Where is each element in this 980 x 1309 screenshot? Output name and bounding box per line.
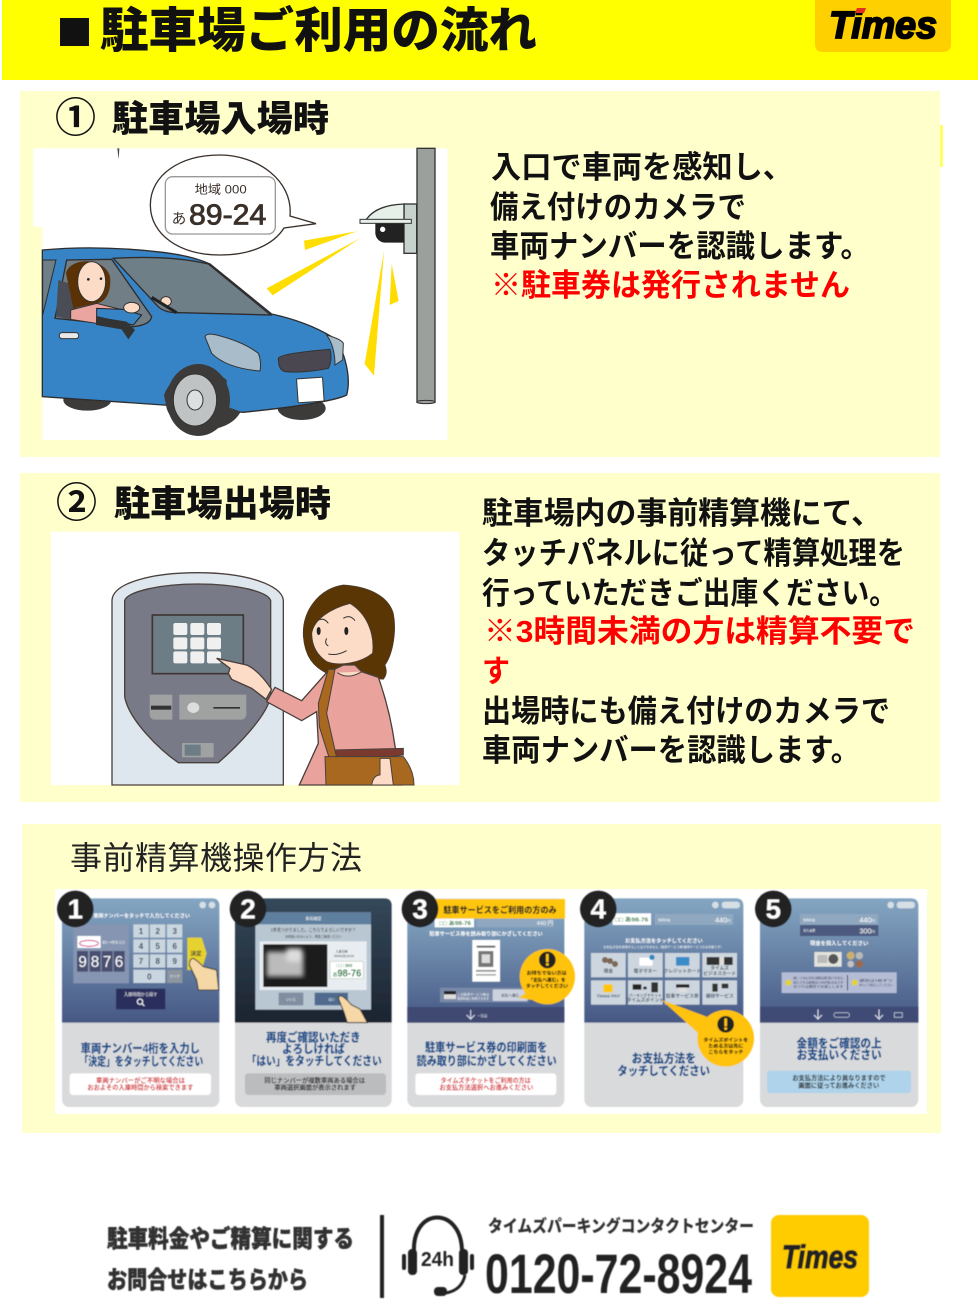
card: step 5: 円 — [871, 919, 875, 923]
card: step 4: タイムズ — [710, 964, 729, 971]
description: exit: 出場時にも備え付けのカメラで — [482, 694, 890, 729]
card: step 4: タッチしてください — [617, 1063, 710, 1078]
step 3 — [402, 891, 575, 1107]
card: step 3: お支払方法選択へお進みください — [439, 1083, 533, 1092]
card: step 5: お支払いください — [797, 1047, 882, 1062]
card: step 1: 6 — [115, 954, 123, 971]
contact center name: タイムズパーキングコンタクトセンター — [488, 1216, 754, 1236]
description: exit: 行っていただきご出庫ください。 — [482, 576, 897, 611]
badge: 5: 5 — [766, 894, 781, 925]
card: step 5: 硬貨は1枚ずつ — [859, 978, 893, 983]
icon: headset: 24h — [421, 1249, 454, 1271]
camera pole — [417, 148, 435, 404]
card: step 4: 現金 — [604, 967, 613, 974]
card: step 2 — [235, 898, 392, 1107]
card: step 1: 4 — [139, 942, 144, 951]
description: entry — [490, 150, 870, 303]
card: step 5 — [760, 898, 918, 1107]
card: step 4: クレジットカード — [664, 967, 701, 974]
card: step 1: 決定 — [190, 950, 202, 958]
card: step 4: □□ あ98-76 — [615, 916, 648, 924]
description: entry: 備え付けのカメラで — [490, 190, 746, 225]
badge: 4: 4 — [591, 894, 607, 925]
card: step 4: お支払方法をタッチしてください — [625, 937, 703, 944]
description: exit: 駐車場内の事前精算機にて、 — [482, 496, 882, 531]
title marker — [60, 18, 89, 46]
card: step 4: お支払方法を — [632, 1051, 696, 1066]
card: step 4: 駐車料金 — [658, 917, 670, 922]
card: step 2: 98-76 — [337, 969, 362, 980]
card: step 4: ビジネスカード — [703, 970, 736, 977]
card: step 3: 一括返 — [477, 1013, 488, 1018]
footer: contact — [107, 1215, 869, 1305]
heading: machine operation: 事前精算機操作方法 — [70, 840, 362, 876]
illustration: payment machine and woman — [51, 532, 459, 785]
panel: exit step — [20, 473, 940, 802]
card: step 2: 再度ご確認いただき — [266, 1030, 361, 1045]
card: step 3: 駐車サービス券の印刷面を — [425, 1040, 547, 1055]
badge: 2 — [230, 891, 266, 927]
card: step 1: 2 — [155, 927, 160, 936]
badge: 5 — [755, 891, 792, 927]
card: step 4: Times PAY — [597, 993, 621, 998]
card: step 2: お間違いのないよう、再度ご確認ください — [285, 934, 342, 939]
card: step 5: 440 — [859, 915, 872, 924]
card: step 3: この駐車サービス券は — [457, 992, 489, 997]
card: step 1: 「決定」をタッチしてください — [79, 1054, 203, 1069]
card: step 4: タイムズポイント — [627, 997, 664, 1004]
steps 1 and 2 — [57, 891, 392, 1107]
description: exit: 車両ナンバーを認識します。 — [482, 733, 860, 768]
title: 駐車場ご利用の流れ — [100, 4, 537, 58]
card: step 5: 300 — [859, 926, 872, 935]
card: step 5: 金額をご確認の上 — [797, 1035, 882, 1050]
card: step 1: クリア — [170, 974, 180, 979]
card: step 2: 車両選択画面が表示されます — [274, 1083, 356, 1092]
card: step 2: よろしければ — [282, 1041, 345, 1056]
card: step 2: はい — [328, 997, 336, 1002]
card: step 3: 駐車サービス券を読み取り部にかざしてください — [429, 931, 543, 938]
card: step 3: 駐車料金に利用できます — [457, 995, 489, 1000]
card: step 1: おおよその入庫時間から検索できます — [87, 1083, 193, 1092]
phone number: 0120-72-8924 — [485, 1242, 752, 1305]
card: step 1: 1 — [139, 927, 144, 936]
steps 4 and 5 — [580, 891, 918, 1107]
card: step 5: お支払方法により異なりますので — [792, 1073, 886, 1082]
description: exit: す — [482, 654, 510, 689]
card: step 2: 車両確認 — [305, 915, 321, 921]
contact prompt — [107, 1225, 354, 1294]
logo: Times — [815, 0, 951, 52]
card: step 3: 支払へ進む — [501, 993, 520, 998]
badge: 4 — [580, 891, 617, 927]
badge: 1 — [57, 891, 94, 927]
card: step 4: 優待サービス — [706, 992, 734, 999]
card: step 5: 駐車料金 — [803, 917, 815, 922]
logo: Times footer — [771, 1215, 869, 1297]
card: step 1: 5 — [155, 942, 160, 951]
card: step 4: 円 — [727, 919, 731, 923]
driver — [66, 261, 177, 339]
card: step 1: 9 — [78, 954, 87, 971]
description: entry: ※駐車券は発行されません — [491, 268, 850, 303]
card: step 2: 入庫日時 — [336, 948, 348, 953]
callout: no ticket — [518, 949, 575, 1004]
badge: 3: 3 — [412, 894, 428, 925]
description: exit — [482, 496, 915, 768]
speech bubble: license plate: 89-24 — [189, 199, 266, 231]
payment machine — [112, 573, 283, 785]
camera — [360, 204, 417, 253]
callout: no ticket: 「支払へ進む」を — [528, 977, 566, 984]
logo: Times: Times — [829, 5, 937, 47]
callout: times points: こちらをタッチ — [708, 1049, 744, 1056]
callout: no ticket: お持ちでない方は — [527, 969, 567, 976]
badge: 2: 2 — [240, 894, 256, 925]
card: step 1: 3 — [172, 927, 177, 936]
card: step 1: 8 — [155, 957, 160, 966]
card: step 5: 新札・シワおよび汚れた紙幣はお取り扱いできません — [793, 975, 843, 980]
card: step 1: 車両ナンバー4桁を入力し — [81, 1040, 200, 1055]
heading: step 1: 駐車場入場時 — [112, 98, 329, 139]
callout: times points — [662, 1000, 754, 1067]
callout: no ticket: タッチしてください — [526, 983, 568, 990]
card: step 1: 車両ナンバーがご不明な場合は — [96, 1075, 186, 1084]
heading: step 2: 駐車場出場時 — [114, 483, 331, 524]
card: step 1: 前1〜4桁を入力 — [102, 939, 126, 944]
icon: headset — [402, 1218, 474, 1296]
callout: times points: タイムズポイントを — [703, 1037, 749, 1044]
card: step 5: 投入できる紙幣は1,000円札のみです — [793, 979, 843, 984]
card: step 2: 99/99(木)18:00 — [334, 953, 354, 958]
panel: machine operation — [22, 824, 941, 1133]
card: step 1: 0 — [147, 972, 152, 981]
description: entry: 車両ナンバーを認識します。 — [490, 229, 870, 264]
card: step 1: 6 — [172, 942, 177, 951]
card: step 3: 440 円 — [537, 920, 554, 927]
card: step 1: 8 — [91, 954, 99, 971]
badge: 3 — [402, 891, 438, 927]
callout: times points: ためる方は先に — [708, 1043, 744, 1050]
heading: step 2: ② — [56, 480, 97, 526]
card: step 2: 1件見つかりました。こちらでよろしいですか？ — [271, 927, 356, 934]
description: exit: ※3時間未満の方は精算不要で — [484, 614, 915, 649]
card: step 5: 画面に従ってお進みください — [798, 1081, 879, 1090]
card: step 3: □□ あ98-76 — [439, 919, 471, 927]
speech bubble: license plate: 地域 000 — [195, 182, 247, 196]
panel: entry step — [20, 91, 943, 457]
woman — [217, 585, 414, 785]
heading: step 1: ① — [55, 95, 96, 141]
contact prompt: お問合せはこちらから — [107, 1267, 308, 1294]
header band — [2, 0, 978, 80]
card: step 5: 現金を投入してください — [810, 939, 869, 947]
card: step 4: お支払方法を併用することはできません（駐車サービス券/優待サービスのみ可能です） — [603, 944, 723, 949]
speech bubble: license plate: あ — [172, 210, 186, 227]
camera beams — [267, 231, 399, 376]
card: step 4: 440 — [715, 915, 727, 924]
card: step 5: 投入金額 — [803, 928, 815, 933]
card: step 2: □□□ 300 — [336, 963, 353, 968]
contact prompt: 駐車料金やご精算に関する — [107, 1225, 354, 1253]
badge: 1: 1 — [68, 894, 83, 925]
card: step 3: 読み取り部にかざしてください — [417, 1053, 557, 1068]
description: entry: 入口で車両を感知し、 — [491, 150, 793, 185]
card: step 1: 入庫時間から探す — [124, 991, 158, 998]
card: step 2: あ — [332, 972, 338, 979]
card: step 3: 駐車サービスをご利用の方のみ — [443, 905, 557, 915]
card: step 2: いいえ — [286, 997, 297, 1002]
card: step 1: 7 — [103, 954, 111, 971]
card: step 1 — [62, 898, 219, 1107]
description: exit: タッチパネルに従って精算処理を — [482, 536, 905, 571]
wheel — [164, 364, 241, 436]
illustration: car and camera — [33, 148, 447, 440]
card: step 1: 9 — [172, 957, 177, 966]
card: step 4: 駐車サービス券 — [666, 992, 699, 999]
card: step 2: 同じナンバーが複数車両ある場合は — [264, 1075, 366, 1084]
card: step 1: 7 — [139, 957, 144, 966]
card: step 4: パーキングチケット — [629, 992, 662, 997]
card: step 4 — [584, 898, 754, 1107]
card: step 5: ゆっくり投入してください — [859, 982, 893, 987]
card: step 5: おつりは硬貨でお返しします — [793, 984, 843, 989]
card: step 2: 「はい」をタッチしてください — [247, 1053, 382, 1068]
car — [42, 248, 348, 436]
logo: Times footer: Times — [782, 1239, 858, 1275]
card: step 3 — [407, 898, 575, 1107]
card: step 4: 電子マネー — [634, 967, 657, 974]
card: step 1: 車両ナンバーをタッチで入力してください — [93, 912, 190, 919]
speech bubble: license plate — [150, 155, 316, 255]
card: step 3: タイムズチケットをご利用の方は — [441, 1075, 531, 1084]
card: step 5: 円 — [871, 930, 875, 934]
